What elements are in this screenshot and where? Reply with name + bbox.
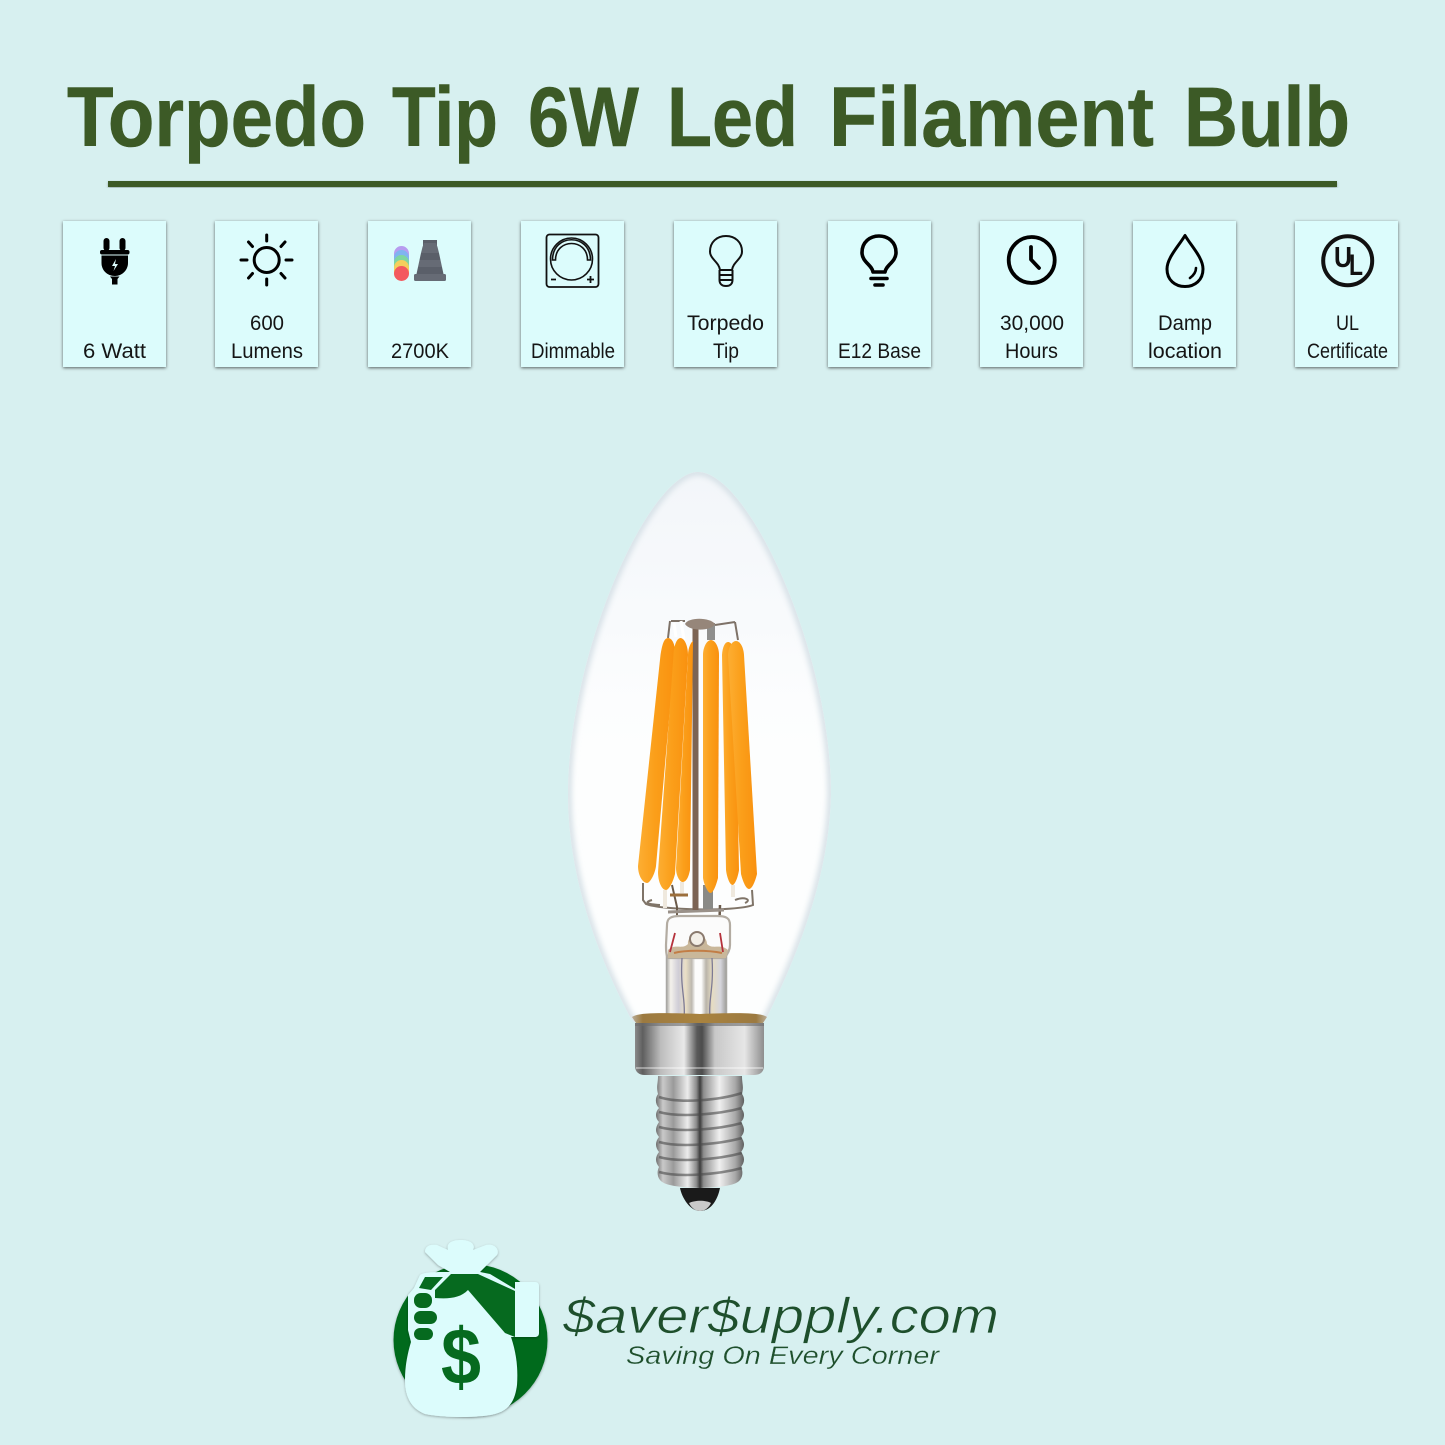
icon: sun xyxy=(241,235,292,285)
icon: colour temperature xyxy=(394,240,446,281)
label: E12 Base: E12 Base xyxy=(838,340,921,363)
title: Led xyxy=(667,70,798,164)
filaments xyxy=(638,638,757,893)
label: 30,000 Hours xyxy=(1000,312,1064,363)
dollar sign: $ xyxy=(441,1312,481,1401)
icon: UL mark xyxy=(1323,236,1372,285)
logo: SaverSupply xyxy=(394,1240,999,1417)
label: UL Certificate: UL xyxy=(1336,312,1359,335)
hand and arm xyxy=(435,1274,515,1337)
panel: Dimmable xyxy=(521,221,624,367)
panel: 6 Watt xyxy=(63,221,166,367)
icon: bold bulb xyxy=(862,236,896,285)
label: UL Certificate xyxy=(1307,312,1388,363)
title: 6W xyxy=(528,70,640,164)
panel: Damp location xyxy=(1133,221,1236,367)
icon: clock xyxy=(1009,237,1055,283)
label: 2700K: 2700K xyxy=(391,340,449,363)
panel: 600 Lumens xyxy=(215,221,318,367)
label: 30,000 Hours: 30,000 xyxy=(1000,312,1064,335)
icon: UL mark: U xyxy=(1334,242,1352,274)
panel: 30,000 Hours xyxy=(980,221,1083,367)
logo circle xyxy=(394,1264,548,1416)
logo tagline: Saving On Every Corner xyxy=(626,1342,941,1370)
panel: E12 Base xyxy=(828,221,931,367)
icon: dimmer dial xyxy=(546,234,598,287)
metal collar xyxy=(635,1023,764,1075)
label: 600 Lumens: Lumens xyxy=(231,340,303,363)
icon: UL mark: L xyxy=(1349,249,1363,282)
title underline xyxy=(108,181,1337,187)
title: Filament xyxy=(829,70,1154,164)
panel: Torpedo Tip xyxy=(674,221,777,367)
title: Tip xyxy=(392,70,498,164)
panel: 2700K xyxy=(368,221,471,367)
label: Torpedo Tip xyxy=(687,312,764,363)
glass stem xyxy=(666,916,730,1018)
label: 600 Lumens: 600 xyxy=(250,312,284,335)
logo wordmark: $aver$upply.com xyxy=(562,1288,999,1344)
central support rod xyxy=(685,619,715,910)
label: 6 Watt: 6 Watt xyxy=(83,340,146,363)
illustration: torpedo filament bulb xyxy=(568,472,831,1211)
label: Damp location: Damp xyxy=(1158,312,1212,335)
label: Torpedo Tip: Tip xyxy=(713,340,739,363)
money bag xyxy=(405,1240,539,1417)
title xyxy=(67,70,1350,164)
fingers xyxy=(414,1293,437,1340)
icon: outline bulb xyxy=(710,236,742,286)
contact tip xyxy=(680,1188,720,1211)
label: Dimmable: Dimmable xyxy=(531,340,615,363)
filament support frame xyxy=(643,621,753,935)
title: Bulb xyxy=(1184,70,1350,164)
label: 30,000 Hours: Hours xyxy=(1005,340,1058,363)
panel: UL Certificate xyxy=(1295,221,1398,367)
label: Damp location xyxy=(1148,312,1222,363)
label: UL Certificate: Certificate xyxy=(1307,340,1388,363)
thumb xyxy=(419,1277,443,1290)
label: 600 Lumens xyxy=(231,312,303,363)
icon: plug xyxy=(100,238,130,284)
label: Damp location: location xyxy=(1148,340,1222,363)
screw thread base xyxy=(656,1076,744,1188)
label: Torpedo Tip: Torpedo xyxy=(687,312,764,335)
icon: water drop xyxy=(1167,236,1203,286)
title: Torpedo xyxy=(67,70,366,164)
glass envelope xyxy=(568,472,831,1022)
amber seal xyxy=(632,1013,767,1023)
